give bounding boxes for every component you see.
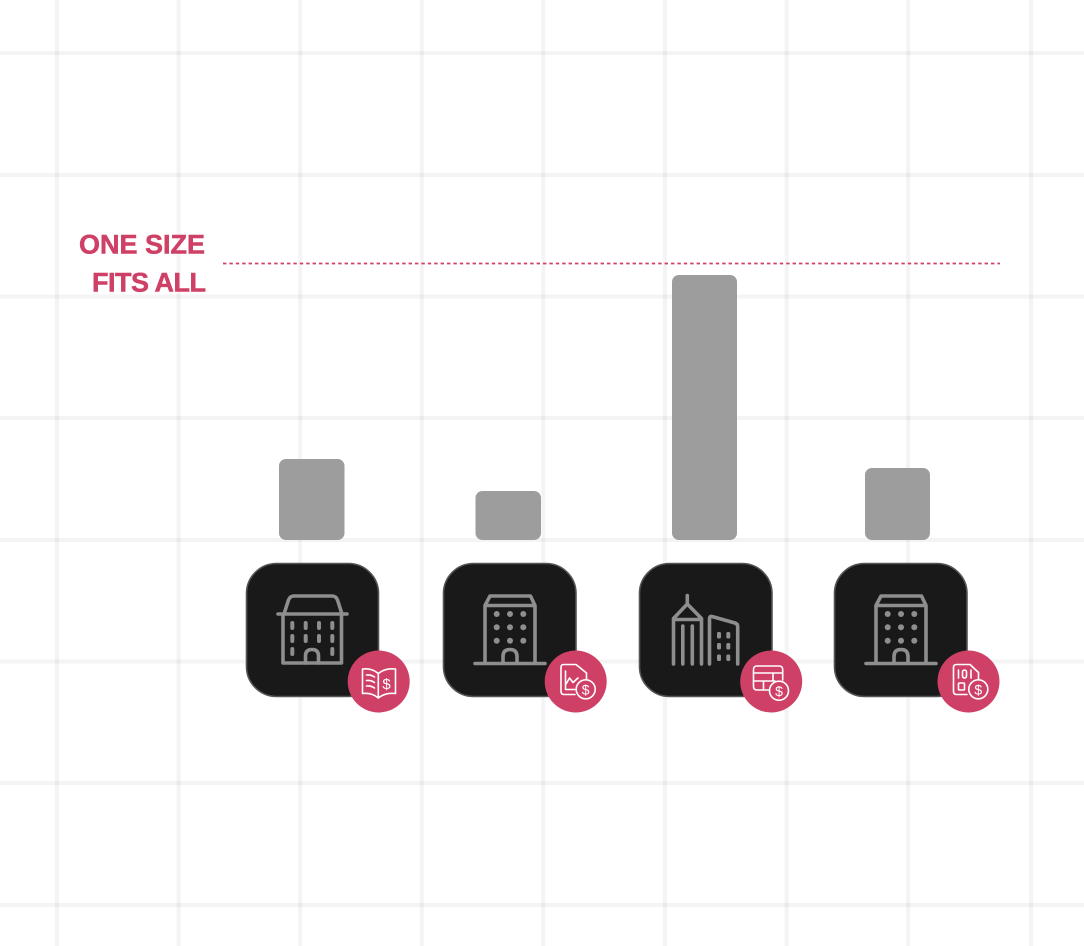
heading: one size fits all bbox=[79, 230, 206, 298]
icon: mid-rise building bbox=[475, 596, 545, 664]
badge: table with dollar coin: $ bbox=[775, 683, 783, 699]
bar 1 bbox=[279, 459, 344, 540]
heading: one size fits all: ONE SIZE bbox=[79, 230, 205, 260]
badge: open book with dollar: $ bbox=[382, 676, 391, 693]
card 1: wide roofed building with book badge bbox=[246, 564, 410, 712]
bar 4 bbox=[865, 468, 930, 540]
icon: skyscrapers bbox=[674, 596, 738, 664]
icon: mid-rise building bbox=[866, 596, 936, 664]
bar 3 bbox=[672, 275, 737, 540]
card background bbox=[444, 564, 576, 696]
badge: SIM card with dollar coin bbox=[938, 650, 1000, 712]
icon: roofed building bbox=[278, 596, 347, 663]
heading: one size fits all: FITS ALL bbox=[92, 268, 206, 298]
card background bbox=[834, 564, 967, 696]
badge: chart document with dollar coin bbox=[545, 650, 607, 712]
card background bbox=[640, 564, 772, 696]
badge: table with dollar coin bbox=[740, 650, 802, 712]
bar chart bbox=[279, 275, 930, 540]
card background bbox=[246, 564, 378, 696]
badge: open book with dollar bbox=[348, 650, 410, 712]
badge: SIM card with dollar coin: $ bbox=[974, 682, 982, 698]
bar 2 bbox=[476, 491, 541, 540]
card 3: skyscrapers with table badge bbox=[640, 564, 802, 712]
card 4: mid-rise building with SIM card badge bbox=[834, 564, 1000, 712]
dotted threshold line bbox=[223, 262, 1000, 264]
badge: chart document with dollar coin: $ bbox=[582, 682, 590, 698]
card 2: mid-rise building with chart document badge bbox=[444, 564, 607, 712]
